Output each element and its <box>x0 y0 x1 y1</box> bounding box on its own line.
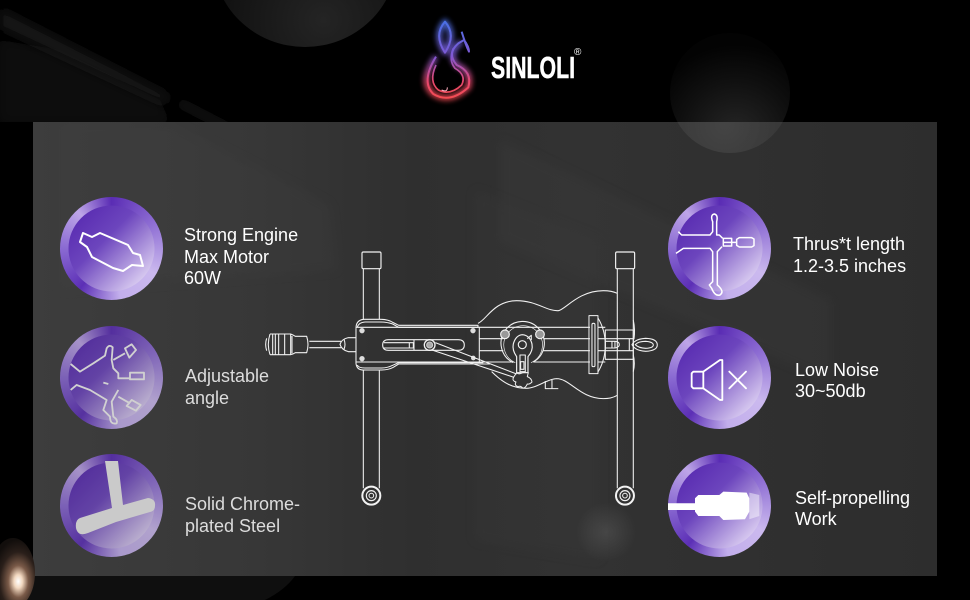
right upright <box>616 252 635 505</box>
brand name: SINLOLI <box>491 50 575 85</box>
corner lamp <box>0 538 35 600</box>
left column text: engine: 60W <box>184 268 221 288</box>
right column text: self-propelling: Self-propelling <box>795 488 910 508</box>
left column text: engine: Strong Engine <box>184 225 298 245</box>
thrust rod and connector <box>266 334 356 355</box>
left column icon: steel frame <box>60 454 163 557</box>
right column icon: self-propelling <box>668 454 771 557</box>
crank wheel <box>501 321 544 373</box>
panel texture <box>60 122 782 556</box>
right column text: low noise: Low Noise <box>795 360 879 380</box>
left column icon: engine <box>60 197 163 300</box>
left column icon: adjustable angle <box>60 326 163 429</box>
left upright <box>362 252 381 505</box>
right column icon: low noise <box>668 326 771 429</box>
left column text: steel: plated Steel <box>185 516 280 536</box>
registered mark: ® <box>574 47 582 58</box>
logo <box>426 22 582 98</box>
machine line drawing <box>266 252 657 505</box>
right column text: thrust length: Thrus*t length <box>793 234 905 254</box>
motor body outline <box>478 291 634 399</box>
right column text: thrust length: 1.2-3.5 inches <box>793 256 906 276</box>
right column text: low noise: 30~50db <box>795 381 866 401</box>
left column text: engine: Max Motor <box>184 247 269 267</box>
panel background <box>33 122 937 576</box>
guide rails <box>479 327 605 362</box>
icon: flame logo <box>426 22 469 98</box>
left column text: steel: Solid Chrome- <box>185 494 300 514</box>
left column text: adjustable angle: angle <box>185 388 229 408</box>
right column text: self-propelling: Work <box>795 509 838 529</box>
left column text: adjustable angle: Adjustable <box>185 366 269 386</box>
crank arm <box>424 340 532 388</box>
slider bracket <box>589 316 657 374</box>
main plate <box>356 319 490 370</box>
right column icon: thrust length <box>668 197 771 300</box>
